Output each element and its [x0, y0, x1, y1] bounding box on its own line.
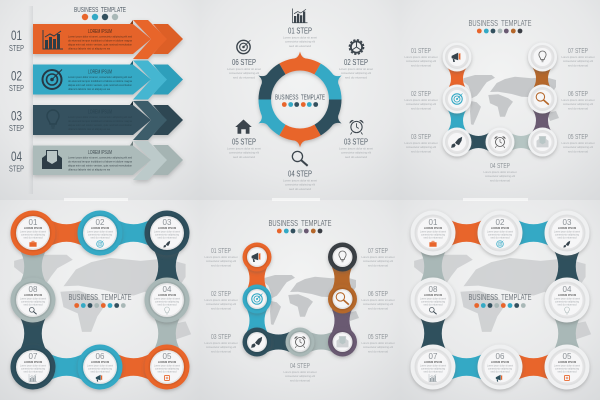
step labels: 07 STEP [568, 48, 588, 55]
node 08: sed do eiusmod [24, 303, 43, 306]
panel title [68, 292, 132, 308]
node 01: 01 [429, 218, 438, 227]
node 07: LOREM IPSUM [24, 360, 42, 364]
step 05: sed do eiusmod [233, 156, 256, 159]
node 02: Lorem ipsum dolor sit amet [87, 230, 113, 233]
step labels: consectetur adipiscing elit [363, 303, 393, 306]
step labels [9, 27, 24, 174]
arrow row 01 [33, 20, 183, 59]
step labels: sed do eiusmod [568, 150, 589, 154]
step 01: Lorem ipsum dolor sit amet [283, 36, 317, 40]
node 05: Lorem ipsum dolor sit amet [154, 364, 180, 367]
node 06: LOREM IPSUM [91, 360, 109, 364]
node 02: consectetur adipiscing [488, 233, 513, 236]
node 01: LOREM IPSUM [24, 226, 42, 230]
node 07: Lorem ipsum dolor sit amet [420, 364, 446, 367]
node 08: consectetur adipiscing [421, 300, 446, 303]
world map [14, 255, 191, 347]
panel title: BUSINESS TEMPLATE [68, 292, 132, 302]
node 06 [78, 344, 122, 390]
step labels: 03 STEP [211, 334, 231, 341]
step 03 [339, 120, 373, 159]
node 03: LOREM IPSUM [158, 226, 176, 230]
node 07: consectetur adipiscing [21, 367, 46, 370]
node 08: 08 [29, 285, 38, 294]
step 02 [339, 40, 373, 80]
step labels: sed do eiusmod [411, 150, 432, 154]
step labels: Lorem ipsum dolor sit amet [484, 171, 517, 174]
node 01 [10, 210, 56, 256]
step labels: STEP [9, 83, 24, 93]
node 07 [10, 344, 56, 390]
circle nodes [442, 42, 557, 156]
arrow row 04: Lorem ipsum dolor sit amet, consectetur adipiscing elit sed [68, 156, 133, 160]
panel title [468, 18, 532, 33]
node 03: 03 [563, 218, 572, 227]
node 04: sed do eiusmod [558, 303, 577, 306]
panel title: BUSINESS TEMPLATE [468, 292, 532, 302]
step labels: Lorem ipsum dolor sit amet [362, 342, 395, 345]
panel title: BUSINESS TEMPLATE [268, 218, 332, 228]
node 08 [10, 278, 56, 322]
node 03: LOREM IPSUM [558, 226, 576, 230]
node 08: LOREM IPSUM [24, 293, 42, 297]
node 02: consectetur adipiscing [88, 233, 113, 236]
step labels: sed do eiusmod [211, 308, 232, 310]
node 07: consectetur adipiscing [421, 367, 446, 370]
node 05: 05 [563, 352, 572, 361]
step labels: sed do eiusmod [368, 350, 389, 354]
node 07: 07 [29, 352, 38, 361]
node 02: 02 [96, 218, 105, 227]
arrow row 03: do eiusmod tempor incididunt ut labore et dolore magna [68, 119, 133, 123]
step labels: STEP [9, 123, 24, 133]
node 05: sed do eiusmod [558, 370, 577, 373]
node 01: sed do eiusmod [24, 236, 43, 239]
arrow row 04: ullamco laboris nisi ut aliquip ex ea [68, 168, 111, 172]
node 04: sed do eiusmod [158, 303, 177, 306]
node 01: consectetur adipiscing [21, 233, 46, 236]
step 05: Lorem ipsum dolor sit amet [227, 148, 261, 150]
step 04: sed do eiusmod [289, 188, 312, 191]
arrow row 03: LOREM IPSUM [88, 110, 112, 116]
step 01 [283, 8, 317, 48]
node 05 [144, 344, 190, 390]
step labels: Lorem ipsum dolor sit amet [204, 299, 238, 302]
node 01: 01 [29, 218, 38, 227]
step 04: consectetur adipiscing elit [285, 184, 315, 186]
node 06: LOREM IPSUM [491, 360, 509, 364]
step labels: sed do eiusmod [411, 64, 432, 68]
step labels: 02 STEP [211, 291, 231, 298]
step labels: 02 STEP [411, 91, 431, 98]
step 05 [227, 120, 261, 159]
step labels: STEP [9, 43, 24, 53]
step labels: 07 STEP [368, 248, 388, 255]
arrow row 04: aliqua enim ad minim veniam, quis nostrud exercitation [68, 164, 133, 168]
step labels: 05 STEP [568, 134, 588, 141]
node 04: LOREM IPSUM [558, 293, 576, 297]
node 02 [478, 210, 522, 256]
node 05: LOREM IPSUM [158, 360, 176, 364]
node 01: sed do eiusmod [424, 236, 443, 239]
node 06: 06 [496, 352, 505, 361]
step 06: consectetur adipiscing elit [229, 72, 259, 75]
node 02: LOREM IPSUM [491, 226, 509, 230]
node 03: Lorem ipsum dolor sit amet [554, 230, 580, 233]
node 03: sed do eiusmod [558, 236, 577, 239]
step labels: consectetur adipiscing elit [363, 260, 393, 263]
step labels: sed do eiusmod [490, 180, 511, 182]
step 05: consectetur adipiscing elit [229, 152, 259, 154]
node 02: Lorem ipsum dolor sit amet [487, 230, 513, 233]
step labels [404, 48, 595, 182]
panel title: BUSINESS TEMPLATE [468, 18, 532, 28]
step labels: Lorem ipsum dolor sit amet [404, 99, 438, 102]
node 05: sed do eiusmod [158, 370, 177, 373]
step labels: 01 [11, 27, 22, 43]
world map [463, 75, 559, 125]
node 08 [410, 278, 456, 322]
node 06: Lorem ipsum dolor sit amet [487, 364, 513, 367]
arrow row 04: LOREM IPSUM [88, 150, 112, 156]
node 07: sed do eiusmod [24, 370, 43, 373]
node icons [251, 251, 349, 348]
step labels: sed do eiusmod [411, 108, 432, 110]
step labels: sed do eiusmod [290, 380, 311, 382]
panel title [268, 218, 332, 233]
segmented ring [248, 52, 352, 148]
step labels: Lorem ipsum dolor sit amet [562, 99, 595, 102]
connectors [448, 68, 552, 152]
arrow row 02: ullamco laboris nisi ut aliquip ex ea [68, 87, 111, 91]
node 04: Lorem ipsum dolor sit amet [554, 297, 580, 300]
arrow row 03: ullamco laboris nisi ut aliquip ex ea [68, 127, 111, 131]
connectors [20, 220, 180, 380]
node 03 [144, 210, 190, 256]
step labels: Lorem ipsum dolor sit amet [204, 342, 238, 345]
arrow row 02: LOREM IPSUM [88, 70, 112, 76]
node 01: consectetur adipiscing [421, 233, 446, 236]
node 01: LOREM IPSUM [424, 226, 442, 230]
arrow row 03 [33, 101, 183, 140]
step labels: 04 [11, 148, 22, 164]
step labels: 05 STEP [368, 334, 388, 341]
step 03: consectetur adipiscing elit [341, 152, 371, 154]
panel: coloured circle path with world map [200, 200, 400, 400]
node 04 [144, 278, 190, 322]
node 05: Lorem ipsum dolor sit amet [554, 364, 580, 367]
arrow row 01: aliqua enim ad minim veniam, quis nostrud exercitation [68, 42, 133, 46]
node 04: consectetur adipiscing [155, 300, 180, 303]
node 01 [410, 210, 456, 256]
connectors [420, 220, 580, 380]
node 06: Lorem ipsum dolor sit amet [87, 364, 113, 367]
panel title: BUSINESS TEMPLATE [74, 7, 126, 14]
step labels: Lorem ipsum dolor sit amet [362, 256, 395, 259]
arrow row 04 [33, 141, 183, 180]
step labels: consectetur adipiscing elit [363, 346, 393, 349]
step labels: Lorem ipsum dolor sit amet [562, 142, 595, 145]
node 05: consectetur adipiscing [555, 367, 580, 370]
step labels: consectetur adipiscing elit [563, 60, 593, 63]
node 04: consectetur adipiscing [555, 300, 580, 303]
ring centre title [275, 94, 325, 107]
node 06 [478, 344, 522, 390]
panel: ring diagram [200, 0, 400, 200]
step labels: Lorem ipsum dolor sit amet [362, 299, 395, 302]
node 08: 08 [429, 285, 438, 294]
step labels: consectetur adipiscing elit [206, 346, 236, 349]
step 02: sed do eiusmod [345, 76, 368, 80]
step 04 [283, 151, 317, 191]
step 04: 04 STEP [288, 170, 312, 178]
step labels: Lorem ipsum dolor sit amet [404, 142, 438, 145]
node 04: Lorem ipsum dolor sit amet [154, 297, 180, 300]
node 05: LOREM IPSUM [558, 360, 576, 364]
panel title [468, 292, 532, 308]
step 02: 02 STEP [344, 58, 368, 67]
node 03: 03 [163, 218, 172, 227]
node 02: LOREM IPSUM [91, 226, 109, 230]
node 07: LOREM IPSUM [424, 360, 442, 364]
step labels: sed do eiusmod [211, 350, 232, 354]
node 07: 07 [429, 352, 438, 361]
step labels: consectetur adipiscing elit [206, 303, 236, 306]
step 02: consectetur adipiscing elit [341, 72, 371, 75]
step 03: 03 STEP [344, 138, 368, 146]
step labels: 03 STEP [411, 134, 431, 141]
step 06 [227, 40, 261, 80]
circle nodes [242, 242, 357, 356]
node 05: consectetur adipiscing [155, 367, 180, 370]
step labels: 01 STEP [211, 248, 231, 255]
node 06: 06 [96, 352, 105, 361]
step labels: Lorem ipsum dolor sit amet [204, 256, 238, 259]
arrow row 01: do eiusmod tempor incididunt ut labore et dolore magna [68, 38, 133, 42]
step labels: consectetur adipiscing elit [406, 103, 436, 106]
node 07: sed do eiusmod [424, 370, 443, 373]
step labels: consectetur adipiscing elit [206, 260, 236, 263]
panel: arrow steps [0, 0, 200, 200]
node 03: sed do eiusmod [158, 236, 177, 239]
step labels: 06 STEP [568, 91, 588, 98]
step 03: sed do eiusmod [345, 156, 368, 159]
step labels: consectetur adipiscing elit [406, 146, 436, 149]
step labels: Lorem ipsum dolor sit amet [562, 56, 595, 59]
node 06: consectetur adipiscing [88, 367, 113, 370]
node 02: sed do eiusmod [90, 236, 110, 239]
node 08: sed do eiusmod [424, 303, 443, 306]
step 06: Lorem ipsum dolor sit amet [227, 68, 261, 71]
step 06: 06 STEP [232, 58, 256, 67]
step labels: consectetur adipiscing elit [406, 60, 436, 63]
node 04: 04 [563, 285, 572, 294]
step labels: 04 STEP [290, 363, 310, 370]
step labels: consectetur adipiscing elit [485, 175, 515, 178]
node 03: Lorem ipsum dolor sit amet [154, 230, 180, 233]
step labels: 02 [11, 68, 22, 84]
step labels: sed do eiusmod [368, 308, 389, 310]
step 05: 05 STEP [232, 138, 256, 146]
ring centre title: BUSINESS TEMPLATE [275, 94, 325, 102]
node 08: LOREM IPSUM [424, 293, 442, 297]
step labels: sed do eiusmod [368, 264, 389, 268]
step labels: consectetur adipiscing elit [563, 103, 593, 106]
arrow row 02 [33, 60, 183, 100]
node 03: consectetur adipiscing [555, 233, 580, 236]
node 06: consectetur adipiscing [488, 367, 513, 370]
step labels: sed do eiusmod [211, 264, 232, 268]
node icons [451, 51, 549, 148]
step labels: STEP [9, 164, 24, 174]
world map [263, 275, 359, 325]
node 07 [410, 344, 456, 390]
arrow row 01: Lorem ipsum dolor sit amet, consectetur adipiscing elit sed [68, 34, 133, 38]
step 01: consectetur adipiscing elit [285, 40, 315, 44]
step 03: Lorem ipsum dolor sit amet [339, 148, 373, 150]
step labels: sed do eiusmod [568, 64, 589, 68]
node 04: LOREM IPSUM [158, 293, 176, 297]
arrow row 02: Lorem ipsum dolor sit amet, consectetur adipiscing elit sed [68, 75, 133, 79]
step labels: 03 [11, 108, 22, 124]
step 02: Lorem ipsum dolor sit amet [339, 68, 373, 71]
node 02: sed do eiusmod [490, 236, 510, 239]
node 03: consectetur adipiscing [155, 233, 180, 236]
panel: white circle path with world map [400, 0, 600, 200]
panel: coloured loop of eight nodes [0, 200, 200, 400]
node 08: Lorem ipsum dolor sit amet [20, 297, 46, 300]
arrow row 03: aliqua enim ad minim veniam, quis nostrud exercitation [68, 123, 133, 127]
step 06: sed do eiusmod [233, 76, 256, 80]
node 02 [78, 210, 122, 256]
world map [414, 255, 591, 347]
arrow row 04: do eiusmod tempor incididunt ut labore et dolore magna [68, 160, 133, 164]
node 05: 05 [163, 352, 172, 361]
node 02: 02 [496, 218, 505, 227]
node 04: 04 [163, 285, 172, 294]
arrow row 01: ullamco laboris nisi ut aliquip ex ea [68, 46, 111, 50]
step labels: 01 STEP [411, 48, 431, 55]
node 04 [544, 278, 590, 322]
arrow row 03: Lorem ipsum dolor sit amet, consectetur adipiscing elit sed [68, 115, 133, 119]
node 06: sed do eiusmod [90, 370, 110, 373]
node 03 [544, 210, 590, 256]
panel: white loop of eight nodes [400, 200, 600, 400]
step labels: sed do eiusmod [568, 108, 589, 110]
node 01: Lorem ipsum dolor sit amet [420, 230, 446, 233]
arrow row 02: do eiusmod tempor incididunt ut labore et dolore magna [68, 79, 133, 83]
node 08: Lorem ipsum dolor sit amet [420, 297, 446, 300]
step 04: Lorem ipsum dolor sit amet [283, 180, 317, 182]
node 05 [544, 344, 590, 390]
step labels [204, 248, 395, 382]
node 06: sed do eiusmod [490, 370, 510, 373]
step labels: 04 STEP [490, 163, 510, 170]
panel title [74, 7, 126, 20]
node 01: Lorem ipsum dolor sit amet [20, 230, 46, 233]
arrow row 01: LOREM IPSUM [88, 29, 112, 35]
step labels: 06 STEP [368, 291, 388, 298]
step labels: consectetur adipiscing elit [285, 375, 315, 378]
step labels: consectetur adipiscing elit [563, 146, 593, 149]
step labels: Lorem ipsum dolor sit amet [284, 371, 317, 374]
step 01: sed do eiusmod [289, 45, 312, 48]
connectors [247, 268, 352, 352]
step 01: 01 STEP [288, 26, 312, 36]
arrow row 02: aliqua enim ad minim veniam, quis nostrud exercitation [68, 83, 133, 87]
node 07: Lorem ipsum dolor sit amet [20, 364, 46, 367]
step labels: Lorem ipsum dolor sit amet [404, 56, 438, 59]
node 08: consectetur adipiscing [21, 300, 46, 303]
